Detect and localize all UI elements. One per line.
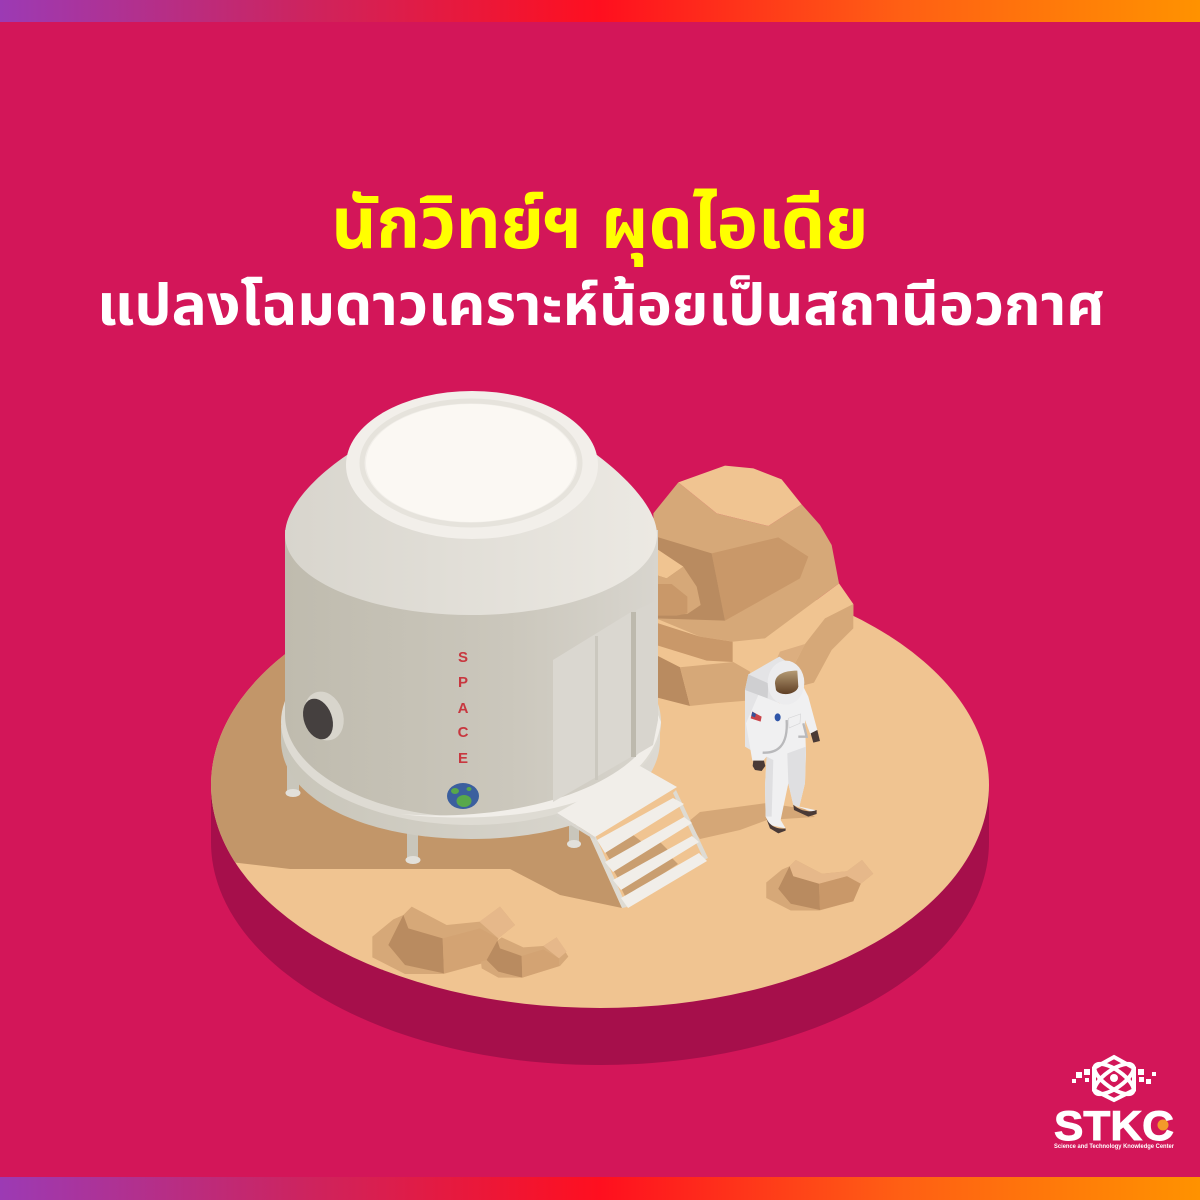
logo wordmark: STKC bbox=[1054, 1102, 1174, 1149]
bottom gradient bar bbox=[0, 1177, 1200, 1200]
suit silhouette bbox=[746, 687, 817, 828]
lower block bbox=[656, 655, 690, 706]
cave light bbox=[656, 548, 683, 578]
disc side shadow bbox=[211, 785, 989, 1065]
logo dot bbox=[1158, 1120, 1168, 1130]
door bbox=[553, 600, 658, 802]
astronaut shadow bbox=[688, 803, 815, 839]
ledge dark face bbox=[656, 623, 733, 662]
STKC logo bbox=[1054, 1057, 1175, 1150]
hose bbox=[763, 720, 807, 753]
boulder dark side bbox=[656, 537, 725, 621]
title line 2: แปลงโฉมดาวเคราะห์น้อยเป็นสถานีอวกาศ bbox=[97, 273, 1105, 338]
roof cap bbox=[346, 391, 598, 539]
door panels bbox=[553, 612, 631, 802]
disc platform bbox=[190, 562, 989, 1065]
stringers bbox=[590, 835, 627, 908]
chest pack bbox=[788, 714, 801, 728]
SPACE lettering: E bbox=[458, 750, 468, 767]
boots bbox=[766, 817, 786, 833]
boulder body bbox=[653, 482, 839, 642]
SPACE lettering: P bbox=[458, 674, 468, 691]
leg left bbox=[287, 750, 299, 792]
habitat module bbox=[281, 391, 661, 864]
legs bbox=[286, 750, 581, 864]
porthole bbox=[298, 686, 350, 746]
SPACE lettering: S bbox=[458, 649, 468, 666]
right rock face bbox=[780, 604, 853, 687]
earth emblem bbox=[447, 783, 479, 809]
wall bbox=[285, 530, 658, 817]
SPACE lettering: A bbox=[458, 700, 469, 717]
disc top bbox=[211, 562, 989, 1008]
cave inner rock bbox=[656, 567, 701, 615]
rock front small bbox=[481, 937, 568, 978]
astronaut bbox=[745, 657, 820, 833]
lower ledge bbox=[656, 583, 853, 707]
back rock formation bbox=[653, 466, 853, 707]
door frame shade bbox=[636, 600, 658, 755]
badge bbox=[775, 713, 781, 721]
rock front left bbox=[372, 907, 515, 974]
rock right bbox=[766, 860, 873, 910]
logo dots bbox=[1072, 1069, 1156, 1084]
SPACE lettering: C bbox=[458, 724, 469, 741]
ledge shade bbox=[773, 644, 805, 667]
stair shadows bbox=[603, 834, 678, 898]
logo tagline: Science and Technology Knowledge Center bbox=[1054, 1144, 1175, 1150]
flag patch bbox=[751, 712, 762, 722]
stairs bbox=[556, 766, 708, 908]
flange highlight bbox=[400, 715, 661, 818]
base flange bbox=[281, 725, 660, 839]
gloves bbox=[753, 761, 765, 771]
helmet bbox=[768, 661, 804, 705]
SPACE lettering bbox=[458, 649, 469, 767]
title bbox=[97, 184, 1105, 338]
platform bbox=[557, 766, 677, 837]
top gradient bar bbox=[0, 0, 1200, 22]
cone roof bbox=[285, 455, 657, 615]
backpack bbox=[745, 657, 797, 752]
boulder front face bbox=[712, 537, 808, 621]
title line 1: นักวิทย์ฯ ผุดไอเดีย bbox=[332, 184, 868, 267]
atom icon bbox=[1090, 1057, 1138, 1100]
building shadow bbox=[190, 640, 622, 908]
leg shading bbox=[765, 747, 806, 817]
boulder top bbox=[678, 466, 802, 526]
steps bbox=[597, 798, 684, 853]
